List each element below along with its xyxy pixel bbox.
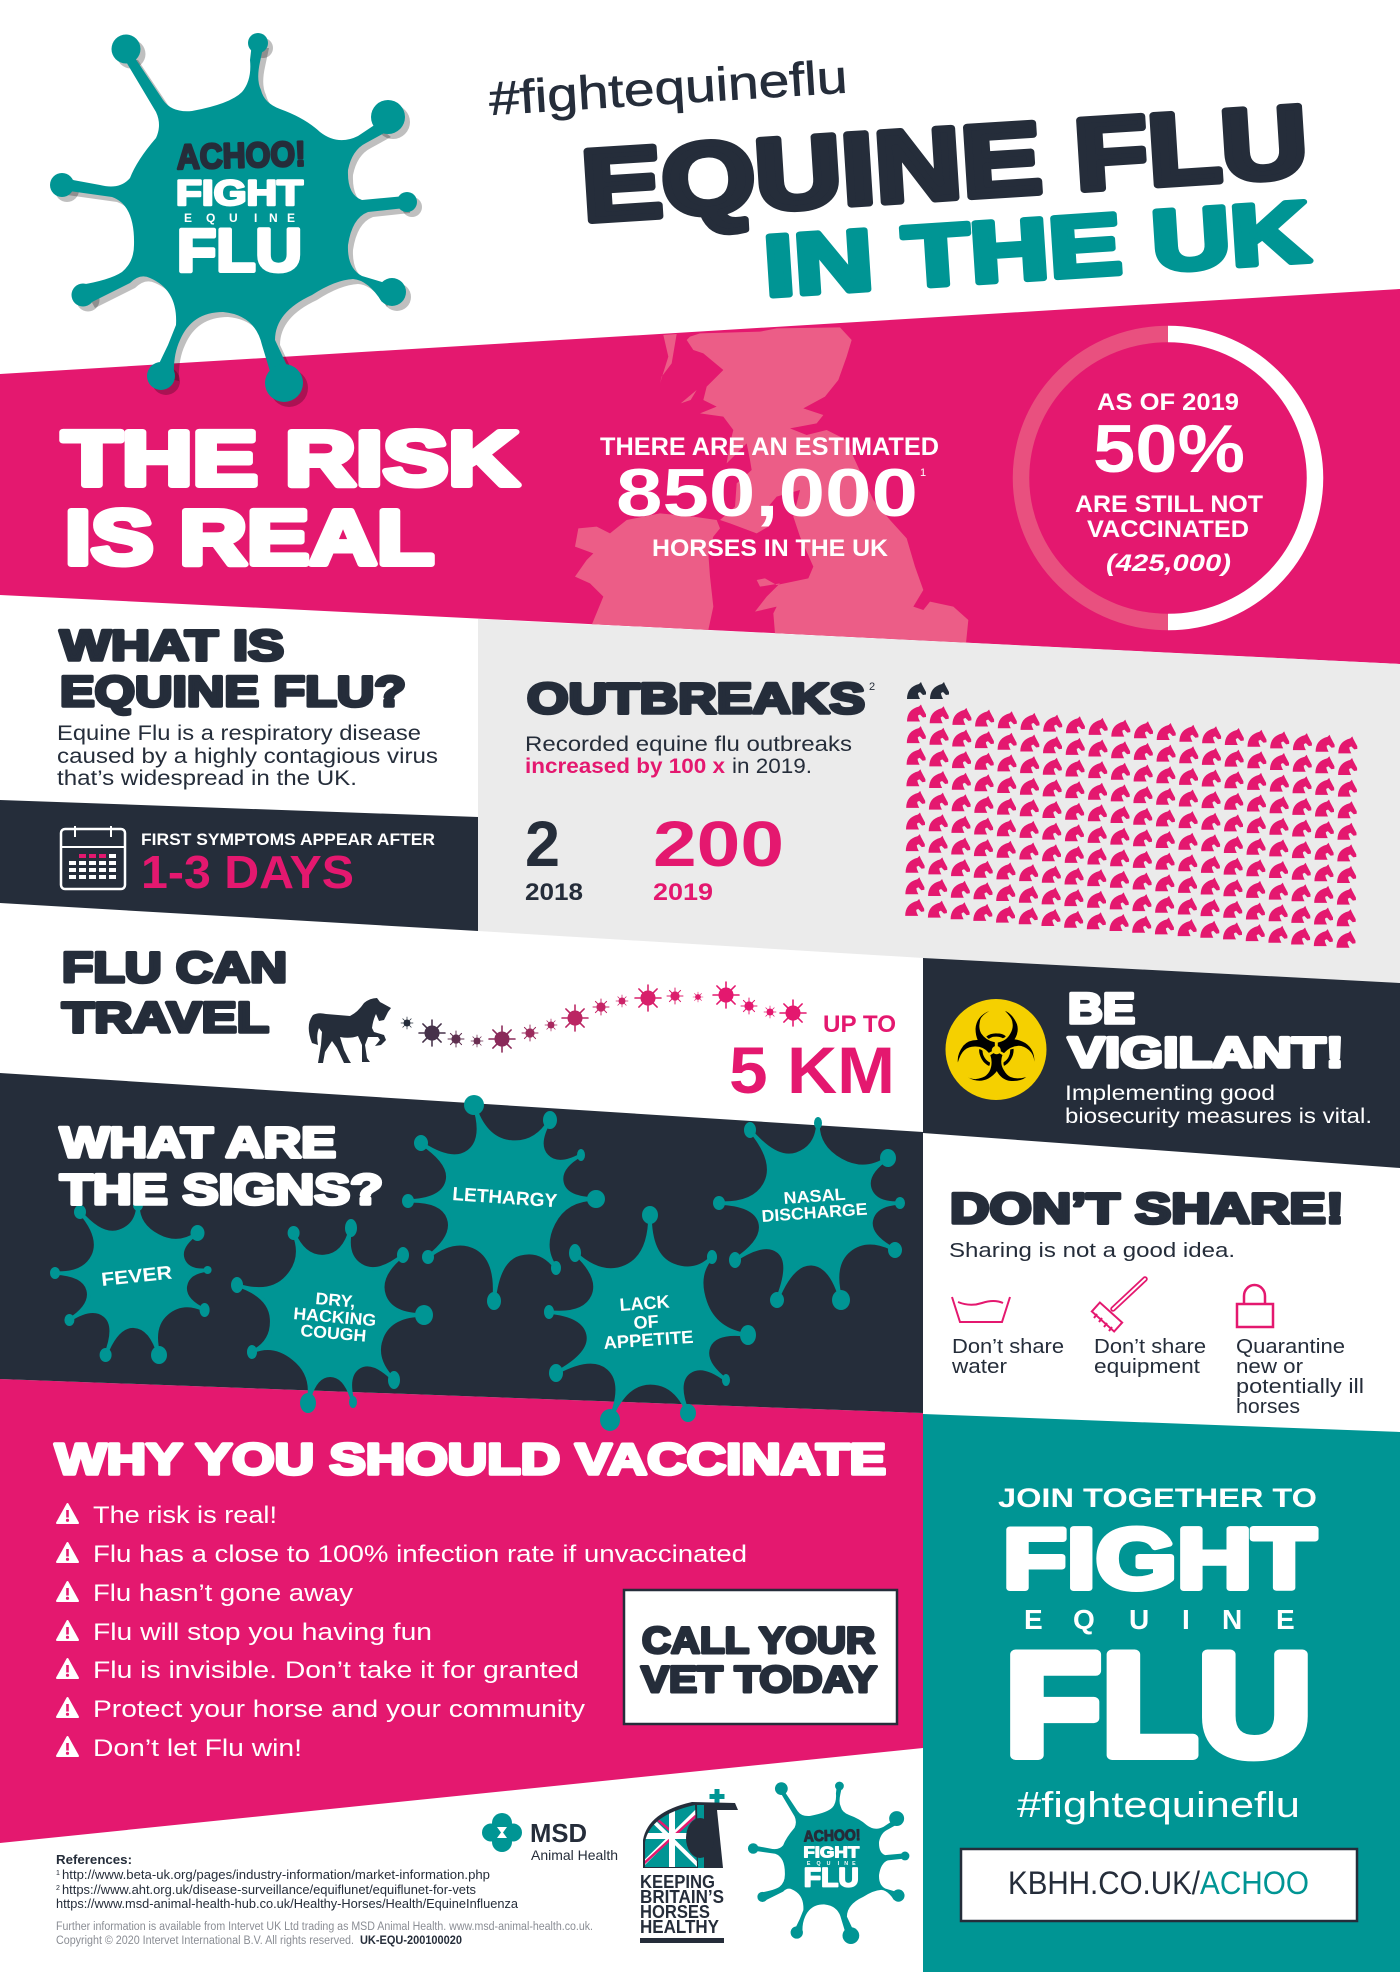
- text: references: 1: [56, 1870, 60, 1877]
- logo: achoo fight equine flu virus: ACHOO!: [176, 135, 306, 177]
- text: legal copyright: [56, 1921, 593, 1947]
- heading: outbreaks: OUTBREAKS: [527, 675, 865, 723]
- logo: small achoo virus: EQUINE: [807, 1861, 856, 1867]
- stat: 850,000 horses: HORSES IN THE UK: [652, 535, 889, 562]
- logo: achoo fight equine flu virus: FLU: [177, 217, 302, 284]
- heading: flu can travel: [62, 944, 287, 1042]
- icon: padlock: [1237, 1285, 1273, 1327]
- stat: 1-3 days: 1-3 DAYS: [141, 846, 354, 898]
- title: equine flu in the uk: [578, 86, 1312, 315]
- text: don't share equipment: [1094, 1336, 1206, 1378]
- virus: dry hacking cough: DRY,: [315, 1289, 356, 1311]
- illustration: trail of virus particles: [401, 982, 806, 1052]
- stat: 50 percent not vaccinated: ARE STILL NOT: [1075, 491, 1263, 518]
- list: reasons to vaccinate: Protect your horse and your community: [93, 1696, 585, 1723]
- pictogram: 200 pink horse heads for 2019: [905, 704, 1357, 948]
- panel: flu can travel: [62, 944, 896, 1107]
- callout: website: ACHOO: [1200, 1865, 1309, 1901]
- virus: lethargy: [402, 1095, 605, 1310]
- list: reasons to vaccinate: Flu hasn’t gone away: [93, 1580, 353, 1607]
- list: reasons to vaccinate: Don’t let Flu win!: [93, 1735, 302, 1762]
- text: definition: that’s widespread in the UK.: [57, 767, 357, 790]
- stat: 50 percent not vaccinated: [1075, 389, 1263, 577]
- list: reasons to vaccinate: Flu has a close to 100% infection rate if unvaccinated: [93, 1541, 747, 1568]
- stat: 200 in 2019: 200: [653, 808, 784, 880]
- title: equine flu in the uk: EQUINE FLU: [578, 86, 1311, 243]
- heading: what is equine flu: [60, 622, 406, 716]
- panel: don't share: [949, 1185, 1364, 1418]
- panel: join together call to action: [923, 1414, 1400, 1972]
- stat: 200 in 2019: [653, 808, 784, 906]
- logo: small achoo virus: FIGHT: [803, 1844, 860, 1861]
- icon: water trough: [952, 1297, 1010, 1322]
- virus: nasal discharge: NASAL: [783, 1185, 846, 1208]
- text: outbreak description: Recorded equine flu outbreaks: [525, 733, 852, 756]
- stat: 2 in 2018: [525, 808, 583, 906]
- logo: keeping britain's horses healthy: HEALTHY: [640, 1917, 719, 1937]
- virus: dry hacking cough: HACKING: [293, 1304, 377, 1330]
- stat: up to 5 km: UP TO: [823, 1011, 896, 1038]
- icon: biohazard: ☣: [953, 992, 1039, 1104]
- text: references: 2: [56, 1885, 60, 1892]
- heading: the risk is real: THE RISK: [62, 416, 519, 502]
- text: legal copyright: UK-EQU-200100020: [360, 1935, 462, 1947]
- text: outbreak description: increased by 100 x: [525, 755, 725, 778]
- heading: be vigilant: BE: [1068, 985, 1135, 1033]
- text: first symptoms appear after: FIRST SYMPTOMS APPEAR AFTER: [141, 830, 435, 849]
- heading: the risk is real: [62, 416, 519, 581]
- wordmark: fight equine flu: [1003, 1512, 1316, 1786]
- heading: what is equine flu: EQUINE FLU?: [60, 668, 406, 716]
- text: quarantine: potentially ill: [1236, 1376, 1364, 1398]
- virus: dry hacking cough: COUGH: [300, 1321, 367, 1346]
- wordmark: fight equine flu: FIGHT: [1003, 1512, 1316, 1607]
- stat: 850,000 horses: 1: [920, 467, 926, 479]
- stat: 850,000 horses: 850,000: [616, 455, 918, 531]
- text: references: https://www.msd-animal-health-hub.co.uk/Healthy-Horses/Health/EquineInfluenza: [56, 1897, 518, 1911]
- text: don't share equipment: Don’t share: [1094, 1336, 1206, 1358]
- text: legal copyright: Further information is available from Intervet UK Ltd trading as MSD Animal Health. www.msd-animal-health.co.uk.: [56, 1921, 593, 1933]
- heading: what are the signs: THE SIGNS?: [60, 1166, 383, 1214]
- footnote marker 2: 2: [869, 681, 875, 693]
- logo: keeping britain's horses healthy: [640, 1789, 738, 1943]
- text: quarantine: [1236, 1336, 1364, 1418]
- map of the UK: [575, 327, 968, 653]
- text: references: [56, 1852, 518, 1911]
- logo: keeping britain's horses healthy: BRITAIN’S: [640, 1887, 724, 1907]
- virus: dry hacking cough: [231, 1219, 433, 1413]
- text: don't share equipment: equipment: [1094, 1356, 1200, 1378]
- hashtag: #fightequineflu: [1017, 1784, 1300, 1825]
- stat: up to 5 km: 5 KM: [729, 1033, 895, 1107]
- stat: 850,000 horses: THERE ARE AN ESTIMATED: [600, 433, 939, 461]
- virus: nasal discharge: DISCHARGE: [761, 1200, 868, 1226]
- pictogram: two dark horse heads for 2018: [907, 682, 949, 699]
- callout: website: KBHH.CO.UK/: [1008, 1865, 1200, 1901]
- text: join together to: JOIN TOGETHER TO: [998, 1483, 1317, 1513]
- text: definition: caused by a highly contagious virus: [57, 745, 438, 768]
- panel: what are the signs: [0, 1073, 923, 1431]
- text: don't share water: [951, 1336, 1064, 1378]
- icon: broom: [1092, 1279, 1145, 1331]
- callout: call your vet today: [624, 1590, 897, 1724]
- heading: what are the signs: WHAT ARE: [60, 1119, 336, 1167]
- virus: nasal discharge: [713, 1117, 905, 1310]
- stat: 200 in 2019: 2019: [653, 879, 713, 906]
- text: sharing is not a good idea: Sharing is not a good idea.: [949, 1240, 1235, 1262]
- stat: 50 percent not vaccinated: (425,000): [1106, 550, 1231, 577]
- stat: 850,000 horses: [600, 433, 939, 562]
- panel: what is equine flu: [57, 622, 438, 790]
- virus: lack of appetite: [544, 1206, 756, 1431]
- heading: flu can travel: TRAVEL: [62, 994, 269, 1042]
- virus: lack of appetite: OF: [633, 1311, 659, 1333]
- virus: fever: FEVER: [100, 1263, 173, 1291]
- heading: why you should vaccinate: WHY YOU SHOULD VACCINATE: [55, 1435, 886, 1484]
- panel: outbreaks: [478, 619, 1400, 983]
- heading: the risk is real: IS REAL: [65, 495, 434, 581]
- stat: 50 percent not vaccinated: VACCINATED: [1087, 516, 1249, 543]
- heading: be vigilant: VIGILANT!: [1068, 1029, 1344, 1077]
- logo: small achoo virus: ACHOO!: [803, 1827, 861, 1845]
- text: outbreak description: in 2019.: [732, 755, 812, 778]
- hashtag: fightequineflu: #fightequineflu: [487, 50, 849, 125]
- heading: be vigilant: [1068, 985, 1344, 1077]
- logo: msd animal health: Animal Health: [531, 1847, 618, 1863]
- logo: keeping britain's horses healthy: HORSES: [640, 1902, 710, 1922]
- heading: what are the signs: [60, 1119, 383, 1214]
- callout: website: [961, 1849, 1357, 1921]
- stat: 2 in 2018: 2018: [525, 879, 583, 906]
- text: outbreak description: [525, 733, 852, 778]
- text: definition: Equine Flu is a respiratory disease: [57, 722, 421, 745]
- virus: fever: [50, 1199, 212, 1364]
- logo: keeping britain's horses healthy: KEEPING: [640, 1872, 715, 1892]
- text: don't share water: Don’t share: [952, 1336, 1064, 1358]
- callout: call your vet today: VET TODAY: [641, 1659, 877, 1700]
- icon: horse silhouette: [309, 998, 391, 1063]
- text: biosecurity: biosecurity measures is vital.: [1065, 1105, 1372, 1128]
- stat: 50 percent not vaccinated: 50%: [1093, 411, 1245, 487]
- panel: the risk is real band: [0, 289, 1400, 664]
- logo: small achoo virus: [748, 1782, 909, 1944]
- logo: small achoo virus: FLU: [804, 1862, 859, 1892]
- virus: lack of appetite: APPETITE: [603, 1327, 694, 1353]
- logo: achoo fight equine flu virus: FIGHT: [176, 174, 303, 213]
- heading: what is equine flu: WHAT IS: [60, 622, 284, 670]
- text: definition: [57, 722, 438, 790]
- stat: 2 in 2018: 2: [525, 808, 560, 880]
- text: references: https://www.aht.org.uk/disease-surveillance/equiflunet/equiflunet-for-vets: [62, 1883, 476, 1897]
- virus: lack of appetite: LACK: [619, 1292, 670, 1315]
- list: reasons to vaccinate: [57, 1502, 747, 1762]
- text: quarantine: new or: [1236, 1356, 1303, 1378]
- icon: calendar: [61, 826, 125, 889]
- stat: 50 percent not vaccinated: AS OF 2019: [1097, 389, 1239, 416]
- virus: lethargy: LETHARGY: [452, 1184, 558, 1212]
- text: references: References:: [56, 1852, 132, 1867]
- text: quarantine: horses: [1236, 1396, 1300, 1418]
- text: don't share water: water: [951, 1356, 1007, 1378]
- logo: achoo fight equine flu virus: EQUINE: [184, 211, 295, 225]
- panel: why you should vaccinate: [0, 1379, 923, 1843]
- wordmark: fight equine flu: FLU: [1005, 1623, 1312, 1786]
- title: equine flu in the uk: IN THE UK: [761, 184, 1312, 315]
- text: biosecurity: Implementing good: [1065, 1082, 1275, 1105]
- list: reasons to vaccinate: The risk is real!: [93, 1502, 277, 1529]
- list: reasons to vaccinate: Flu will stop you having fun: [93, 1619, 432, 1646]
- heading: don't share: DON’T SHARE!: [950, 1185, 1344, 1233]
- text: legal copyright: Copyright © 2020 Intervet International B.V. All rights reserved.: [56, 1935, 354, 1947]
- text: biosecurity: [1065, 1082, 1372, 1128]
- chart: 50 percent ring: [1021, 334, 1315, 622]
- heading: flu can travel: FLU CAN: [62, 944, 287, 992]
- wordmark: fight equine flu: EQUINE: [1024, 1604, 1295, 1635]
- panel: first symptoms: [0, 800, 478, 931]
- logo: msd animal health: MSD: [530, 1818, 587, 1848]
- logo: achoo fight equine flu virus: [50, 33, 422, 407]
- logo: msd animal health: [482, 1813, 618, 1863]
- callout: call your vet today: CALL YOUR: [642, 1620, 875, 1661]
- list: reasons to vaccinate: Flu is invisible. Don’t take it for granted: [93, 1657, 579, 1684]
- text: references: http://www.beta-uk.org/pages/industry-information/market-information.php: [62, 1868, 490, 1882]
- text: quarantine: Quarantine: [1236, 1336, 1345, 1358]
- panel: be vigilant: [923, 958, 1400, 1168]
